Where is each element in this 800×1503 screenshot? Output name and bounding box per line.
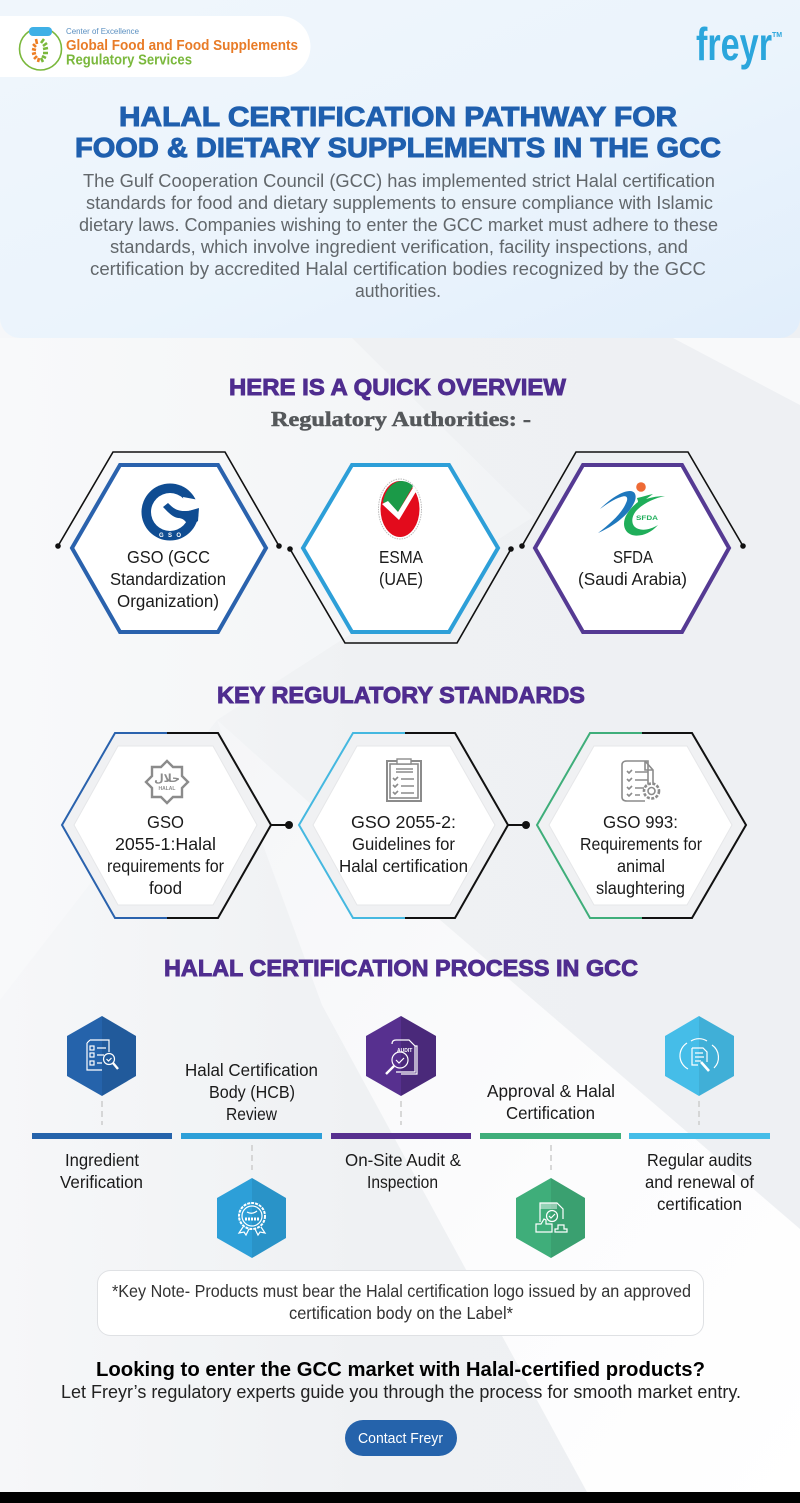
- label: GSO: [147, 812, 184, 832]
- heading: certification process: HALAL CERTIFICATION PROCESS IN GCC: [164, 955, 638, 981]
- freyr logo: freyr: [696, 18, 772, 70]
- callout: key note: *Key Note- Products must bear the Halal certification logo issued by an approved: [112, 1281, 691, 1301]
- panel: GSO 993: [537, 733, 746, 918]
- label: Regular audits: [647, 1150, 752, 1170]
- icon: halal star: HALAL: [159, 786, 175, 792]
- badge text: Regulatory Services: [66, 52, 192, 68]
- icon: document search: [87, 1040, 118, 1070]
- call to action text: Let Freyr’s regulatory experts guide you through the process for smooth market entry.: [61, 1381, 741, 1402]
- GSO label: Organization): [117, 591, 219, 611]
- SFDA label: [578, 547, 687, 589]
- call to action text: [61, 1359, 741, 1402]
- intro paragraph: The Gulf Cooperation Council (GCC) has implemented strict Halal certification: [83, 170, 715, 191]
- call to action text: Looking to enter the GCC market with Halal-certified products?: [96, 1359, 705, 1381]
- label: On-Site Audit &: [345, 1150, 461, 1170]
- SFDA label: (Saudi Arabia): [578, 569, 687, 589]
- icon: document renew: [680, 1039, 718, 1071]
- label: [580, 812, 702, 898]
- label: food: [149, 878, 182, 898]
- label: animal: [617, 856, 665, 876]
- intro paragraph: [79, 170, 718, 301]
- ESMA label: ESMA: [379, 547, 423, 567]
- icon: GSO logo: [142, 484, 199, 540]
- panel: ESMA: [287, 465, 514, 643]
- ESMA label: [379, 547, 423, 589]
- SFDA label: SFDA: [613, 547, 653, 567]
- badge text: Center of Excellence: [66, 26, 139, 36]
- label: [107, 812, 224, 898]
- label: Halal Certification: [185, 1060, 318, 1080]
- GSO label: Standardization: [110, 569, 226, 589]
- label: Halal certification: [339, 856, 468, 876]
- GSO label: GSO (GCC: [127, 547, 210, 567]
- label: Body (HCB): [209, 1082, 295, 1102]
- label: slaughtering: [596, 878, 685, 898]
- icon: clipboard: [387, 759, 421, 801]
- icon: halal badge: [239, 1203, 265, 1235]
- badge text: Global Food and Food Supplements: [66, 38, 298, 54]
- icon: halal star: حلال: [154, 772, 180, 785]
- title: HALAL CERTIFICATION PATHWAY FOR: [119, 101, 677, 132]
- freyr logo: TM: [772, 32, 782, 39]
- label: Ingredient: [65, 1150, 139, 1170]
- step 4: approval: [480, 1081, 621, 1258]
- icon: SFDA logo: SFDA: [636, 515, 658, 522]
- icon: audit magnifier: [386, 1040, 417, 1074]
- intro paragraph: dietary laws. Companies wishing to enter the GCC market must adhere to these: [79, 214, 718, 235]
- heading: quick overview: HERE IS A QUICK OVERVIEW: [229, 374, 567, 400]
- label: [345, 1150, 461, 1192]
- label: [645, 1150, 754, 1214]
- title: [75, 101, 721, 163]
- panel: GSO 2055-1: [62, 733, 293, 918]
- label: GSO 2055-2:: [351, 812, 456, 832]
- title: FOOD & DIETARY SUPPLEMENTS IN THE GCC: [75, 132, 721, 163]
- label: Inspection: [367, 1172, 438, 1192]
- label: Approval & Halal: [487, 1081, 615, 1101]
- button: contact freyr: [345, 1420, 457, 1456]
- label: Certification: [506, 1103, 595, 1123]
- label: 2055-1:Halal: [115, 834, 216, 854]
- heading: key regulatory standards: KEY REGULATORY STANDARDS: [217, 682, 585, 708]
- label: [185, 1060, 318, 1124]
- label: Guidelines for: [352, 834, 455, 854]
- step 1: ingredient verification: [32, 1016, 172, 1192]
- icon: approval stamp: [536, 1203, 567, 1232]
- panel: GSO 2055-2: [299, 733, 530, 918]
- icon: halal star: [146, 761, 188, 803]
- intro paragraph: standards for food and dietary supplements to ensure compliance with Islamic: [86, 192, 713, 213]
- panel: SFDA: [519, 452, 746, 632]
- icon: SFDA logo: [598, 482, 665, 536]
- ESMA label: (UAE): [379, 569, 423, 589]
- icon: GSO logo: GSO: [159, 533, 181, 539]
- icon: audit magnifier: AUDIT: [397, 1048, 412, 1054]
- callout: key note: [98, 1270, 704, 1336]
- intro paragraph: standards, which involve ingredient verification, facility inspections, and: [110, 236, 688, 257]
- icon: wheat logo: [20, 27, 62, 70]
- icon: checklist with gear: [622, 761, 659, 801]
- label: [487, 1081, 615, 1123]
- label: Verification: [60, 1172, 143, 1192]
- intro paragraph: authorities.: [355, 280, 441, 301]
- step 3: on-site audit: [331, 1016, 471, 1192]
- subheading: regulatory authorities: Regulatory Authorities: -: [271, 407, 531, 431]
- panel: GSO: [55, 452, 282, 632]
- step 5: renewal: [629, 1016, 770, 1214]
- label: Requirements for: [580, 834, 702, 854]
- label: [339, 812, 468, 876]
- label: certification: [657, 1194, 742, 1214]
- label: GSO 993:: [603, 812, 678, 832]
- header panel: [0, 0, 800, 338]
- label: Review: [226, 1104, 277, 1124]
- badge text: [66, 26, 298, 68]
- step 2: HCB review: [181, 1060, 322, 1258]
- label: and renewal of: [645, 1172, 754, 1192]
- badge: center of excellence: [0, 16, 310, 77]
- button: contact freyr: Contact Freyr: [358, 1430, 443, 1447]
- intro paragraph: certification by accredited Halal certification bodies recognized by the GCC: [90, 258, 706, 279]
- callout: key note: certification body on the Label*: [289, 1303, 513, 1323]
- label: requirements for: [107, 856, 224, 876]
- icon: ESMA logo: [378, 479, 422, 539]
- GSO label: [110, 547, 226, 611]
- label: [60, 1150, 143, 1192]
